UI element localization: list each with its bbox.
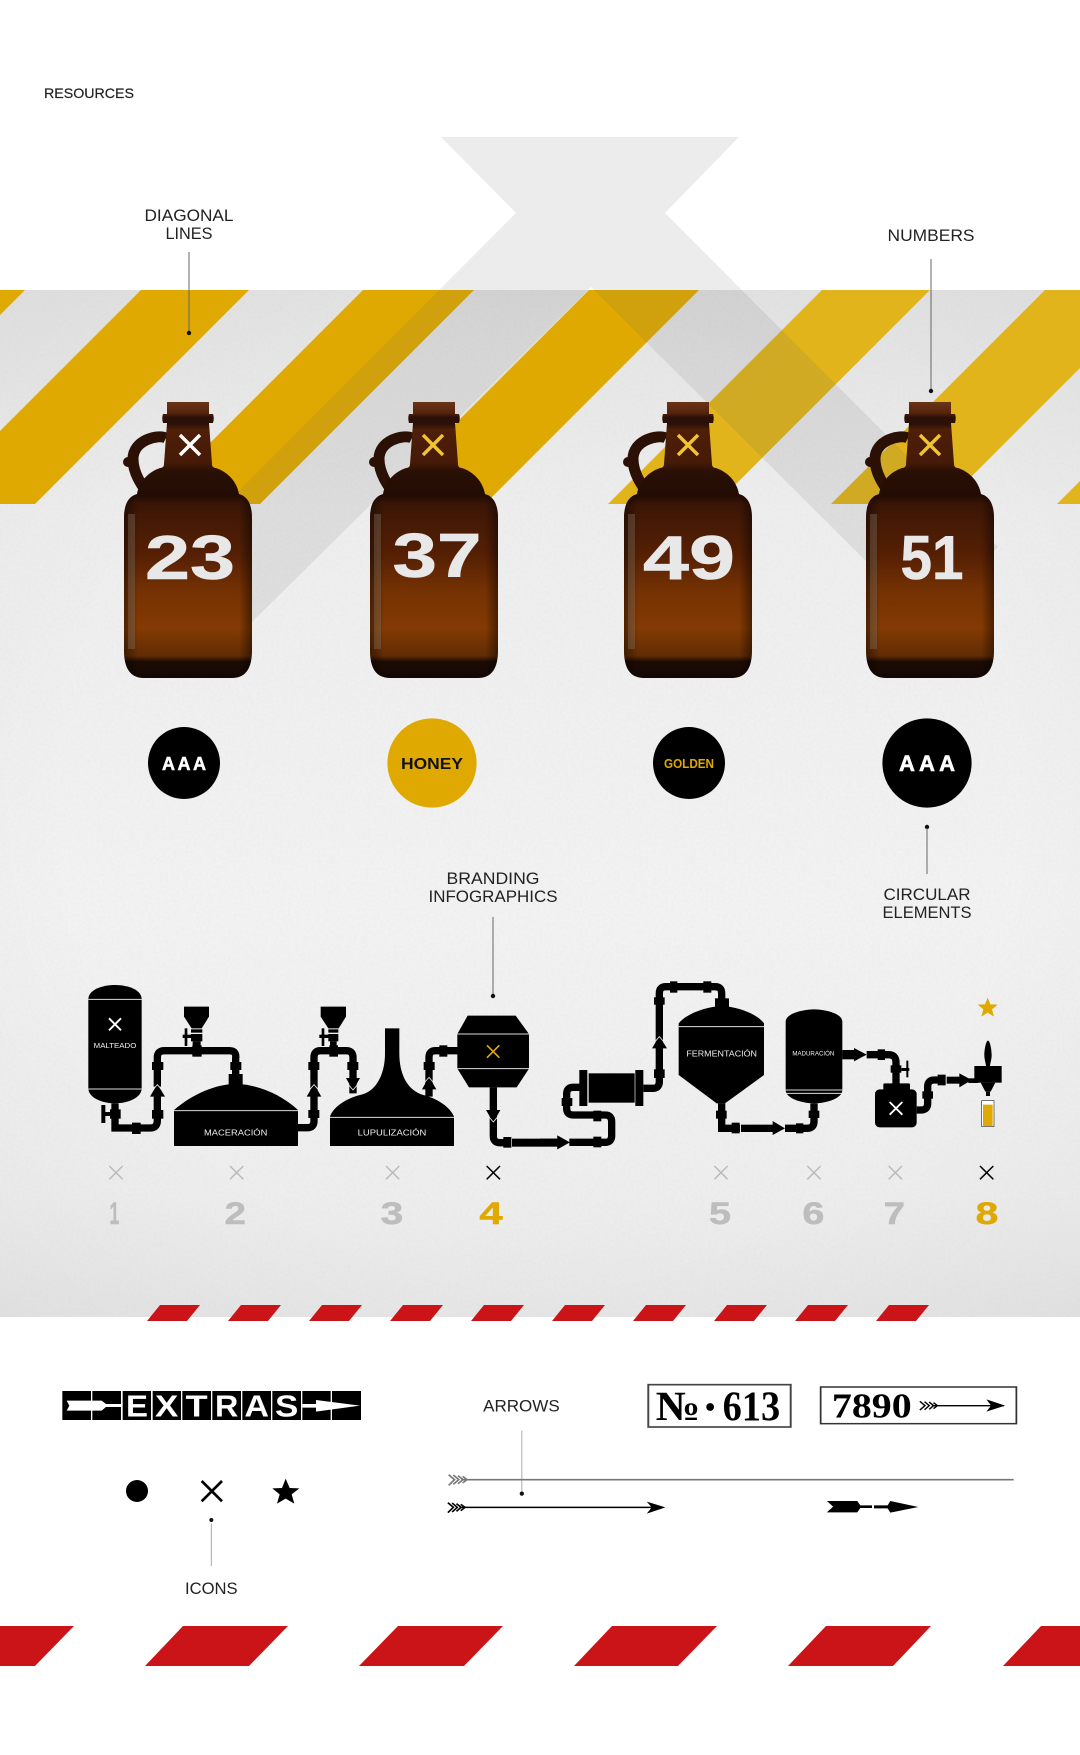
step numbers one to four: 4: [479, 1195, 503, 1231]
tank maduracion: MADURACIÓN: [792, 1049, 835, 1058]
icon: cross: [202, 1481, 222, 1501]
arrows section: [448, 1383, 1016, 1514]
tank lupulizacion: [330, 1028, 454, 1146]
label: circular elements: [882, 825, 972, 922]
bottle 3: 49: [643, 524, 735, 593]
bottle 3: [623, 402, 752, 678]
extras banner: A: [244, 1390, 269, 1424]
step numbers five to eight: 6: [802, 1195, 824, 1231]
label: branding infographics: INFOGRAPHICS: [428, 887, 558, 906]
grey X arms: [180, 137, 998, 622]
process diagram right part: [540, 981, 1002, 1231]
pipe malteado to maceracion: [101, 1007, 243, 1134]
textured panel: [0, 290, 1080, 1317]
tank lupulizacion: LUPULIZACIÓN: [358, 1128, 426, 1138]
label: diagonal lines: LINES: [166, 224, 212, 243]
step numbers five to eight: 5: [709, 1195, 731, 1231]
arrow: long black: [448, 1502, 665, 1514]
gold star: [978, 998, 998, 1017]
pipe maceracion to lupulizacion: [298, 1007, 360, 1128]
diagonal yellow stripes: [0, 290, 1080, 504]
circle AAA large: AAA: [899, 751, 955, 776]
extras banner: E: [126, 1390, 148, 1424]
step numbers one to four: 3: [381, 1195, 403, 1231]
pipe to maduracion: [716, 1103, 819, 1135]
label: numbers: [888, 226, 974, 393]
tank maceracion: MACERACIÓN: [204, 1128, 267, 1138]
extras banner: X: [155, 1390, 179, 1424]
pipe to condenser: [540, 1087, 612, 1149]
tank fermentacion: [679, 1006, 764, 1103]
step numbers one to four: 1: [109, 1195, 119, 1231]
label: icons: ICONS: [185, 1579, 238, 1598]
bottle 4: 51: [900, 524, 964, 593]
circle golden: [653, 727, 725, 799]
process diagram left part: [88, 985, 570, 1231]
extras banner: S: [275, 1390, 298, 1424]
step numbers five to eight: 7: [884, 1195, 905, 1231]
arrow: long grey: [449, 1475, 1014, 1485]
tap: [968, 1041, 1002, 1096]
tank maceracion: [174, 1084, 298, 1146]
extras banner: [62, 1390, 361, 1424]
tank maduracion: [786, 1009, 842, 1103]
pipe to keg: [842, 1048, 909, 1084]
beer glass: [982, 1101, 994, 1127]
arrow: heavy short: [827, 1501, 918, 1513]
large red dashes: [0, 1626, 1080, 1666]
small red dashes: [147, 1305, 929, 1321]
number badge 613: №: [656, 1383, 700, 1429]
step numbers one to four: [109, 1195, 503, 1231]
step numbers one to four: 2: [225, 1195, 246, 1231]
bottle 4: [865, 402, 994, 678]
label: icons: [185, 1518, 238, 1598]
cross markers one to four: [109, 1166, 500, 1179]
number badge 7890: 7890: [832, 1387, 912, 1426]
bottle 1: [123, 402, 252, 678]
number badge 7890: [821, 1387, 1016, 1426]
number badge 613: [648, 1383, 791, 1430]
pipe to vessel four: [422, 1045, 458, 1097]
icon: star: [272, 1479, 299, 1504]
condenser: [579, 1070, 643, 1106]
extras banner: T: [186, 1390, 208, 1424]
number badge 613: 613: [723, 1383, 780, 1430]
pipe to fermentacion: [643, 981, 729, 1088]
label: circular elements: CIRCULAR: [884, 885, 970, 904]
extras banner: R: [215, 1390, 238, 1424]
label: arrows: [483, 1396, 560, 1496]
circle honey: [387, 718, 477, 808]
pipe to tap: [917, 1073, 972, 1110]
keg: [875, 1083, 917, 1127]
label: branding infographics: [428, 869, 558, 998]
label: numbers: NUMBERS: [888, 226, 974, 245]
step numbers five to eight: [709, 1195, 998, 1231]
bottle 2: [369, 402, 498, 678]
tank fermentacion: FERMENTACIÓN: [686, 1049, 757, 1059]
label: diagonal lines: DIAGONAL: [144, 206, 234, 225]
bottle 1: 23: [145, 524, 235, 593]
resources heading: RESOURCES: [44, 85, 134, 101]
cross markers five to eight: [714, 1166, 993, 1179]
tank malteado: [88, 985, 142, 1103]
vessel four: [457, 1016, 529, 1087]
circle AAA small: AAA: [162, 754, 206, 774]
circle golden: GOLDEN: [664, 757, 714, 771]
circle honey: HONEY: [401, 756, 464, 773]
bottle 2: 37: [392, 522, 482, 591]
label: diagonal lines: [144, 206, 234, 335]
extras section: [62, 1390, 361, 1598]
icon: circle: [126, 1480, 148, 1502]
label: arrows: ARROWS: [483, 1396, 560, 1415]
circle AAA small: [148, 727, 220, 799]
label: circular elements: ELEMENTS: [882, 903, 972, 922]
step numbers five to eight: 8: [976, 1195, 998, 1231]
pipe from vessel four: [486, 1087, 570, 1149]
circle AAA large: [882, 718, 972, 808]
label: branding infographics: BRANDING: [446, 869, 540, 888]
tank malteado: MALTEADO: [94, 1043, 137, 1050]
